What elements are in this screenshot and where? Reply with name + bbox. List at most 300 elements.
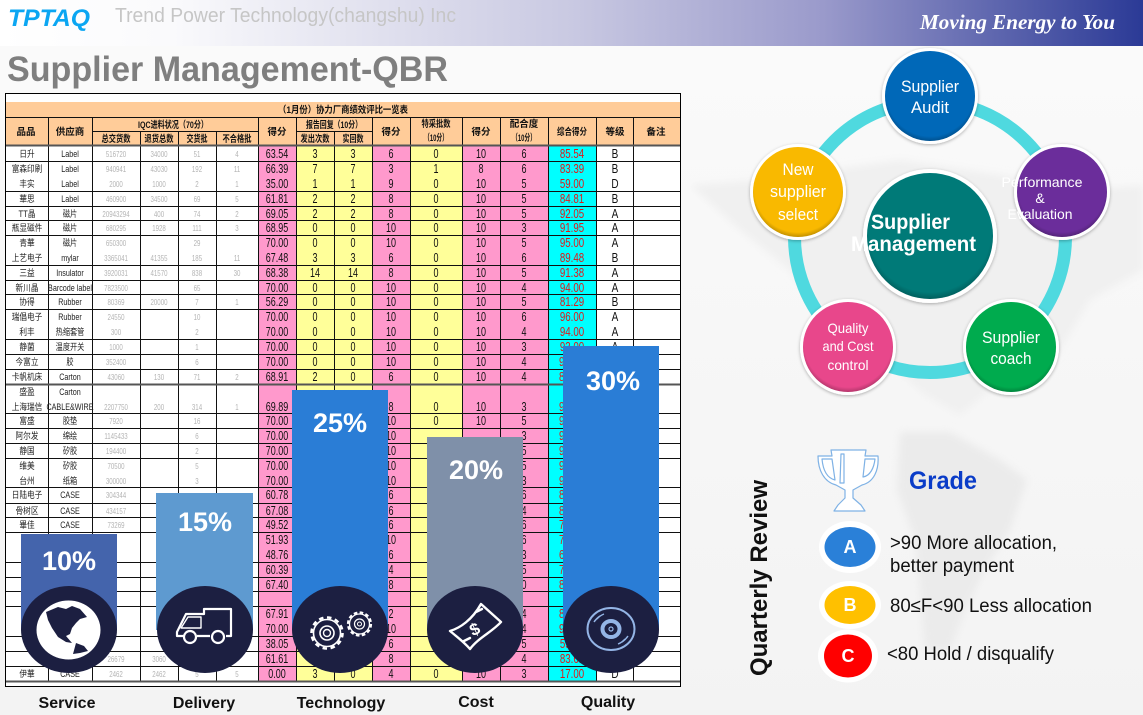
- column: total delivered: 516720: [106, 149, 126, 159]
- column: report score: 10: [386, 237, 396, 250]
- column: special concessions: 0: [433, 296, 439, 309]
- icon: gears: [292, 586, 388, 673]
- category labels: Cost: [458, 694, 494, 711]
- column: cooperation score: 3: [521, 222, 527, 235]
- weight bar: cost: 20%: [449, 455, 503, 485]
- column: reports returned: 0: [350, 341, 356, 354]
- table header: 发出次数: [300, 133, 330, 145]
- column: supplier categories: Barcode label: [48, 283, 92, 293]
- node: supplier audit: [882, 48, 978, 144]
- icon: disc: [563, 586, 659, 673]
- column: commodity names: 阿尔发: [16, 430, 39, 441]
- column: report score: 6: [388, 371, 394, 384]
- column: IQC score: 69.05: [266, 208, 288, 221]
- column: total score leading digits: 8: [559, 579, 564, 592]
- column: supplier categories: mylar: [61, 253, 79, 263]
- table header: 得分: [267, 126, 287, 138]
- column: total delivered: 43060: [108, 372, 124, 382]
- column: total score leading digits: 7: [559, 519, 564, 532]
- column: supplier categories: Rubber: [58, 297, 82, 307]
- column: report score: 10: [386, 534, 396, 547]
- column: grade letters: B: [612, 296, 618, 309]
- column: reports returned: 2: [350, 193, 356, 206]
- column: IQC score: 70.00: [266, 341, 288, 354]
- column: total score: 17.00: [560, 668, 584, 681]
- column: cooperation score: 4: [521, 371, 527, 384]
- column: cooperation score: 5: [521, 564, 527, 577]
- column: report score: [386, 148, 396, 681]
- node: quality and cost control: and Cost: [822, 338, 874, 354]
- column: concession score: 10: [476, 415, 486, 428]
- column: delivered batches: 69: [194, 194, 200, 204]
- column: concession score: 10: [476, 178, 486, 191]
- column: report score: 10: [386, 460, 396, 473]
- column: commodity names: 三益: [19, 267, 35, 278]
- column: total delivered: 304344: [106, 490, 126, 500]
- column: commodity names: 伊華: [19, 668, 35, 679]
- column: total score: 83.39: [560, 163, 584, 176]
- column: concession score: 10: [476, 282, 486, 295]
- column: IQC score: 60.78: [266, 489, 288, 502]
- column: commodity names: 静国: [19, 445, 35, 456]
- column: total score: 95.00: [560, 237, 584, 250]
- column: concession score: 10: [476, 326, 486, 339]
- column: total score leading digits: 9: [559, 445, 564, 458]
- column: rejected batches: 11: [234, 164, 240, 174]
- column: supplier categories: 温度开关: [56, 341, 84, 352]
- column: returned total: 41570: [151, 268, 167, 278]
- column: total score leading digits: 9: [559, 460, 564, 473]
- column: total delivered: 300000: [106, 476, 126, 486]
- column: returned total: 130: [154, 372, 164, 382]
- column: grade letters: D: [611, 668, 619, 681]
- column: reports sent: 1: [312, 178, 318, 191]
- column: total score leading digits: 9: [559, 430, 564, 443]
- column: cooperation score: 5: [521, 208, 527, 221]
- column: special concessions: 0: [433, 222, 439, 235]
- column: report score: 10: [386, 623, 396, 636]
- column: cooperation score: 4: [521, 356, 527, 369]
- column: IQC score: 69.89: [266, 401, 288, 414]
- column: IQC score: 67.48: [266, 252, 288, 265]
- column: report score: 2: [388, 608, 394, 621]
- weight bar: cost: [427, 437, 523, 630]
- column: total score: 91.38: [560, 267, 584, 280]
- column: grade letters: A: [612, 237, 619, 250]
- column: IQC score: 61.81: [266, 193, 288, 206]
- column: special concessions: 0: [433, 237, 439, 250]
- column: supplier categories: CABLE&WIRE: [46, 402, 94, 412]
- column: delivered batches: 314: [192, 402, 202, 412]
- column: IQC score: 67.08: [266, 505, 288, 518]
- column: returned total: 34000: [151, 149, 167, 159]
- column: delivered batches: 6: [195, 357, 199, 367]
- column: rejected batches: 1: [235, 179, 239, 189]
- column: concession score: 10: [476, 311, 486, 324]
- column: cooperation score: 5: [521, 445, 527, 458]
- node: supplier coach: [963, 299, 1059, 395]
- slogan: Moving Energy to You: [919, 10, 1115, 34]
- column: concession score: [476, 148, 486, 681]
- column: special concessions: 0: [433, 252, 439, 265]
- column: special concessions: [433, 148, 439, 681]
- node: performance and evaluation: [1002, 144, 1110, 240]
- node: center supplier management: Management: [851, 233, 976, 256]
- column: total delivered: 3365041: [104, 253, 128, 263]
- column: delivered batches: 111: [192, 223, 202, 233]
- column: cooperation score: 6: [521, 489, 527, 502]
- column: rejected batches: 5: [235, 669, 239, 679]
- column: supplier categories: CASE: [60, 520, 80, 530]
- column: delivered batches: 185: [192, 253, 202, 263]
- column: IQC score: 70.00: [266, 356, 288, 369]
- column: reports returned: 1: [350, 178, 356, 191]
- weight bar: service: 10%: [42, 546, 96, 576]
- column: returned total: 400: [154, 209, 164, 219]
- column: delivered batches: 5: [195, 461, 199, 471]
- column: reports sent: 2: [312, 371, 318, 384]
- column: concession score: 8: [478, 163, 484, 176]
- table header: 备注: [646, 126, 666, 138]
- column: cooperation score: 5: [521, 237, 527, 250]
- column: cooperation score: 3: [521, 475, 527, 488]
- column: reports sent: 0: [312, 311, 318, 324]
- category labels: Quality: [581, 694, 635, 711]
- column: IQC score: [266, 148, 288, 681]
- column: supplier categories: 胶垫: [63, 415, 77, 426]
- column: supplier categories: Carton: [59, 387, 81, 397]
- node: new supplier select: select: [778, 205, 818, 224]
- column: reports sent: 0: [312, 282, 318, 295]
- table header: 交货批: [186, 133, 208, 145]
- category labels: [39, 694, 635, 712]
- node: center supplier management: [851, 169, 997, 303]
- column: concession score: 10: [476, 193, 486, 206]
- column: total delivered: 2000: [109, 179, 123, 189]
- column: total delivered: 70500: [108, 461, 124, 471]
- table header: 实回数: [342, 133, 364, 145]
- table header: 报告回复（10分）: [306, 119, 362, 131]
- column: concession score: 10: [476, 252, 486, 265]
- column: cooperation score: 0: [521, 579, 527, 592]
- column: reports returned: [348, 148, 358, 681]
- column: total delivered: 24550: [108, 312, 124, 322]
- column: special concessions: 0: [433, 668, 439, 681]
- supplier scorecard table: [6, 94, 680, 686]
- column: commodity names: 丰实: [19, 178, 35, 189]
- column: total score leading digits: 9: [559, 415, 564, 428]
- table header: 总交货数: [102, 133, 131, 145]
- category labels: Delivery: [173, 695, 235, 712]
- column: returned total: 2462: [152, 669, 166, 679]
- column: cooperation score: 4: [521, 608, 527, 621]
- column: special concessions: 0: [433, 326, 439, 339]
- column: report score: 10: [386, 326, 396, 339]
- column: commodity names: 维美: [19, 460, 35, 471]
- column: reports sent: 0: [312, 356, 318, 369]
- column: supplier categories: Label: [61, 194, 79, 204]
- column: reports returned: 0: [350, 371, 356, 384]
- column: total delivered: 80369: [108, 297, 124, 307]
- icon: banknote: [427, 586, 523, 673]
- column: total delivered: 300: [111, 327, 121, 337]
- node: supplier audit: Audit: [911, 98, 949, 117]
- column: reports returned: 0: [350, 222, 356, 235]
- icon: banknote: $: [466, 619, 484, 640]
- column: cooperation score: 5: [521, 267, 527, 280]
- column: total delivered: 20943294: [102, 209, 130, 219]
- column: report score: 4: [388, 668, 394, 681]
- column: delivered batches: 6: [195, 431, 199, 441]
- column: IQC score: 48.76: [266, 549, 288, 562]
- column: rejected batches: 4: [235, 149, 239, 159]
- column: total score leading digits: 8: [559, 489, 564, 502]
- column: delivered batches: 1: [195, 342, 199, 352]
- column: delivered batches: [192, 149, 202, 679]
- column: cooperation score: 5: [521, 638, 527, 651]
- column: rejected batches: 30: [234, 268, 240, 278]
- column: reports returned: 3: [350, 252, 356, 265]
- column: cooperation score: 5: [521, 193, 527, 206]
- column: IQC score: 51.93: [266, 534, 288, 547]
- column: reports sent: [310, 148, 320, 681]
- column: commodity names: TT晶: [19, 208, 35, 219]
- column: delivered batches: 5: [195, 669, 199, 679]
- column: reports returned: 0: [350, 311, 356, 324]
- column: commodity names: 盛盈: [19, 386, 35, 397]
- table header: 供应商: [56, 126, 84, 138]
- logo: TPTAQ: [8, 5, 90, 32]
- column: cooperation score: 6: [521, 311, 527, 324]
- column: report score: 6: [388, 519, 394, 532]
- column: report score: 10: [386, 415, 396, 428]
- column: grade letters: A: [612, 282, 619, 295]
- header band: [0, 0, 1143, 46]
- column: cooperation score: 3: [521, 430, 527, 443]
- column: cooperation score: 4: [521, 623, 527, 636]
- grade C: [818, 630, 1054, 682]
- column: rejected batches: 2: [235, 372, 239, 382]
- column: cooperation score: 3: [521, 668, 527, 681]
- weight bar: quality: [563, 346, 659, 630]
- column: concession score: 10: [476, 208, 486, 221]
- column: cooperation score: 3: [521, 549, 527, 562]
- column: delivered batches: 71: [194, 372, 200, 382]
- table header: [16, 118, 666, 145]
- column: total score: 83.61: [560, 653, 584, 666]
- node: new supplier select: New: [782, 160, 814, 179]
- column: commodity names: 今富立: [16, 356, 38, 367]
- column: total score leading digits: 9: [559, 623, 564, 636]
- column: special concessions: 0: [433, 178, 439, 191]
- column: concession score: 10: [476, 148, 486, 161]
- column: reports returned: 0: [350, 668, 356, 681]
- column: report score: 6: [388, 505, 394, 518]
- table header: 配合度: [510, 118, 539, 130]
- column: supplier categories: CASE: [60, 490, 80, 500]
- column: grade letters: D: [611, 178, 619, 191]
- column: total delivered: 352400: [106, 357, 126, 367]
- column: rejected batches: 3: [235, 223, 239, 233]
- supplier management cycle diagram: [750, 48, 1110, 395]
- weight bar: service: [21, 534, 117, 630]
- column: report score: 8: [388, 401, 394, 414]
- column: grade letters: B: [612, 148, 618, 161]
- column: total score: 91.95: [560, 222, 584, 235]
- column: grade letters: [611, 148, 619, 681]
- column: report score: 3: [388, 163, 394, 176]
- column: IQC score: 38.05: [266, 638, 288, 651]
- column: cooperation score: 6: [521, 148, 527, 161]
- column: total score: 81.29: [560, 296, 584, 309]
- node: center supplier management: Supplier: [871, 211, 950, 234]
- column: total score: 85.54: [560, 148, 584, 161]
- column: commodity names: 富盛: [19, 415, 35, 426]
- column: supplier categories: Label: [61, 164, 79, 174]
- column: delivered batches: 2: [195, 327, 199, 337]
- column: reports returned: 0: [350, 296, 356, 309]
- weight bar: quality: 30%: [586, 366, 640, 396]
- column: rejected batches: 1: [235, 402, 239, 412]
- column: report score: 6: [388, 549, 394, 562]
- column: concession score: 10: [476, 401, 486, 414]
- column: cooperation score: 4: [521, 505, 527, 518]
- column: commodity names: 上艺电子: [12, 252, 42, 263]
- column: rejected batches: 5: [235, 194, 239, 204]
- column: commodity names: 瓶显磁件: [12, 222, 42, 233]
- column: total score: 92.05: [560, 208, 584, 221]
- table title: （1月份）协力厂商绩效评比一览表: [278, 104, 408, 116]
- weight bar: delivery: [156, 493, 253, 630]
- column: IQC score: 70.00: [266, 430, 288, 443]
- column: IQC score: 67.91: [266, 608, 288, 621]
- weight bar: delivery: 15%: [178, 507, 232, 537]
- column: IQC score: 66.39: [266, 163, 288, 176]
- grade B: [819, 581, 1092, 629]
- column: commodity names: 日陆电子: [12, 489, 42, 500]
- grade A: A: [844, 537, 856, 557]
- column: total delivered: 940941: [106, 164, 126, 174]
- grade A: >90 More allocation,: [890, 533, 1057, 554]
- column: reports returned: 2: [350, 208, 356, 221]
- column: total score leading digits: 9: [559, 475, 564, 488]
- column: IQC score: 63.54: [266, 148, 288, 161]
- column: commodity names: 新川晶: [16, 282, 38, 293]
- column: delivered batches: 2: [195, 179, 199, 189]
- column: delivered batches: 838: [192, 268, 202, 278]
- column: commodity names: 台州: [19, 475, 35, 486]
- column: total score leading digits: 8: [559, 371, 564, 384]
- column: reports sent: 0: [312, 296, 318, 309]
- column: commodity names: [12, 148, 43, 679]
- column: commodity names: 青華: [19, 237, 35, 248]
- grade A: [819, 521, 1057, 577]
- column: total delivered: 2462: [109, 669, 123, 679]
- column: special concessions: 0: [433, 148, 439, 161]
- column: supplier categories: Carton: [59, 372, 81, 382]
- column: supplier categories: Label: [61, 179, 79, 189]
- column: cooperation score: 3: [521, 341, 527, 354]
- column: rejected batches: 11: [234, 253, 240, 263]
- column: commodity names: 卡帆机床: [12, 371, 43, 382]
- column: report score: 6: [388, 489, 394, 502]
- column: report score: 10: [386, 475, 396, 488]
- column: commodity names: 协得: [19, 296, 35, 307]
- column: special concessions: 0: [433, 371, 439, 384]
- column: commodity names: 瑞倡电子: [12, 311, 42, 322]
- column: cooperation score: 3: [521, 401, 527, 414]
- column: total score: 93.00: [560, 341, 584, 354]
- column: IQC score: 61.61: [266, 653, 288, 666]
- column: report score: 10: [386, 222, 396, 235]
- quarterly review vertical label: Quarterly Review: [746, 480, 773, 676]
- column: delivered batches: 65: [194, 283, 200, 293]
- category labels: Service: [39, 695, 96, 712]
- column: IQC score: 70.00: [266, 460, 288, 473]
- column: total score: 94.00: [560, 282, 584, 295]
- column: report score: 10: [386, 311, 396, 324]
- column: grade letters: A: [612, 341, 619, 354]
- node: performance and evaluation: Performance: [1002, 174, 1083, 190]
- column: grade letters: A: [612, 267, 619, 280]
- node: new supplier select: supplier: [770, 182, 826, 201]
- grade B: 80≤F<90 Less allocation: [890, 596, 1092, 617]
- column: special concessions: 0: [433, 282, 439, 295]
- column: special concessions: 0: [433, 208, 439, 221]
- column: report score: 6: [388, 252, 394, 265]
- table header: 综合得分: [557, 126, 587, 138]
- column: reports sent: 0: [312, 222, 318, 235]
- column: total delivered: 2207750: [104, 402, 128, 412]
- column: cooperation score: 6: [521, 519, 527, 532]
- column: cooperation score: 6: [521, 252, 527, 265]
- column: grade letters: A: [612, 222, 619, 235]
- column: special concessions: 0: [433, 415, 439, 428]
- column: cooperation score: [521, 148, 527, 681]
- column: total delivered: 1145433: [104, 431, 128, 441]
- column: total delivered: 460900: [106, 194, 126, 204]
- table header: 等级: [605, 126, 625, 138]
- column: special concessions: 1: [433, 163, 439, 176]
- column: report score: 10: [386, 296, 396, 309]
- column: report score: 8: [388, 267, 394, 280]
- company name: Trend Power Technology(changshu) Inc: [115, 5, 456, 27]
- column: special concessions: 0: [433, 193, 439, 206]
- column: IQC score: 70.00: [266, 282, 288, 295]
- table header: （10分）: [512, 132, 536, 144]
- column: IQC score: 70.00: [266, 415, 288, 428]
- column: delivered batches: 16: [194, 416, 200, 426]
- weight bar: technology: [292, 390, 388, 630]
- column: grade letters: B: [612, 193, 618, 206]
- node: quality and cost control: control: [828, 357, 868, 373]
- column: IQC score: 70.00: [266, 326, 288, 339]
- node: supplier audit: Supplier: [901, 77, 959, 96]
- column: cooperation score: 4: [521, 326, 527, 339]
- column: total score leading digits: 7: [559, 564, 564, 577]
- column: supplier categories: Rubber: [58, 312, 82, 322]
- column: supplier categories: 热缩套管: [56, 326, 84, 337]
- column: concession score: 10: [476, 237, 486, 250]
- column: reports sent: 14: [310, 267, 320, 280]
- table header: 退货总数: [144, 133, 174, 145]
- column: concession score: 10: [476, 341, 486, 354]
- column: report score: 10: [386, 445, 396, 458]
- column: cooperation score: 4: [521, 653, 527, 666]
- column: commodity names: 畢佳: [19, 519, 35, 530]
- title: Supplier Management-QBR: [7, 50, 448, 89]
- column: total delivered: 7920: [109, 416, 123, 426]
